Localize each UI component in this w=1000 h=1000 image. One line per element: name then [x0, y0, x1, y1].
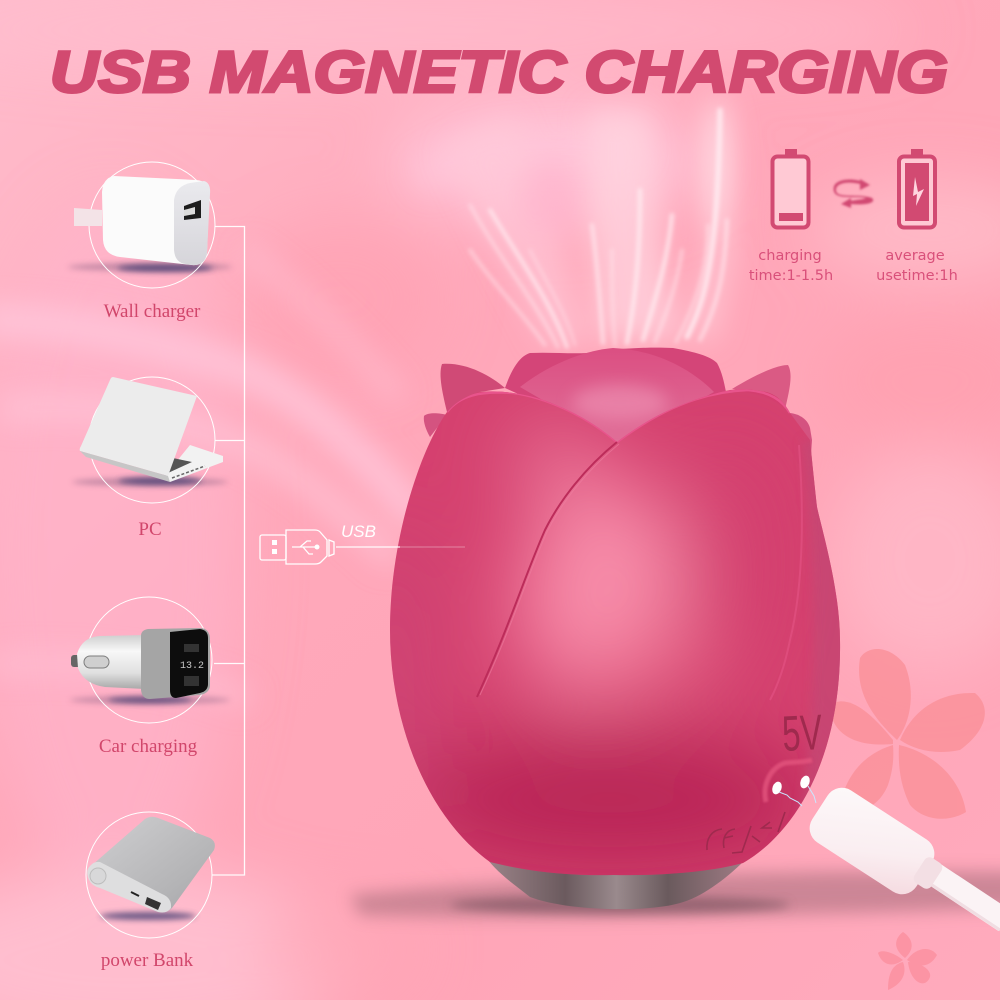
label: 5V: 5V: [781, 704, 824, 762]
label: Car charging: [99, 736, 198, 757]
icon: full battery: [899, 149, 935, 228]
charger: car charger: [70, 597, 230, 757]
charger: laptop: [72, 377, 228, 540]
body shading: [373, 424, 820, 870]
certification marks: [707, 812, 785, 853]
flower large: [830, 649, 985, 819]
label: charging time: charging: [758, 248, 822, 264]
back petals: [505, 348, 726, 440]
label: Wall charger: [104, 301, 201, 322]
flower small: [878, 932, 937, 990]
magnetic port: [765, 760, 812, 802]
product: rose: [373, 348, 850, 909]
icon: swap arrows: [834, 179, 873, 208]
right petal rim: [617, 390, 790, 442]
title: USB MAGNETIC CHARGING: [50, 40, 948, 105]
watermark flowers: [830, 649, 985, 990]
shadow: [70, 696, 230, 704]
icon: empty battery: [772, 149, 808, 228]
icon: USB plug: [260, 522, 465, 564]
ground shadow: [350, 871, 1000, 918]
shadow: [68, 263, 232, 272]
shadow: [72, 477, 228, 486]
connector lines: [212, 226, 244, 875]
light rays above product: [470, 110, 727, 347]
charger: car charger: 13.2: [180, 661, 204, 672]
right seam: [770, 445, 802, 700]
sepals: [441, 364, 505, 412]
label: PC: [138, 519, 162, 540]
main body: [373, 380, 850, 890]
charger: power bank: [86, 812, 215, 971]
label: USB: [341, 522, 376, 541]
left petal rim: [447, 393, 617, 442]
petal seam: [477, 442, 617, 697]
silver base: [488, 860, 745, 909]
label: usage time: usetime:1h: [876, 268, 958, 284]
label: power Bank: [101, 950, 194, 971]
label: usage time: average: [885, 248, 945, 264]
charging cable: [803, 781, 1000, 930]
top bud: [520, 348, 714, 445]
battery status panel: [749, 149, 958, 284]
steam glow: [445, 95, 735, 345]
label: charging time: time:1-1.5h: [749, 268, 833, 284]
charger: wall charger: [68, 162, 232, 322]
background streaks: [0, 144, 640, 700]
shadow: [100, 912, 196, 920]
